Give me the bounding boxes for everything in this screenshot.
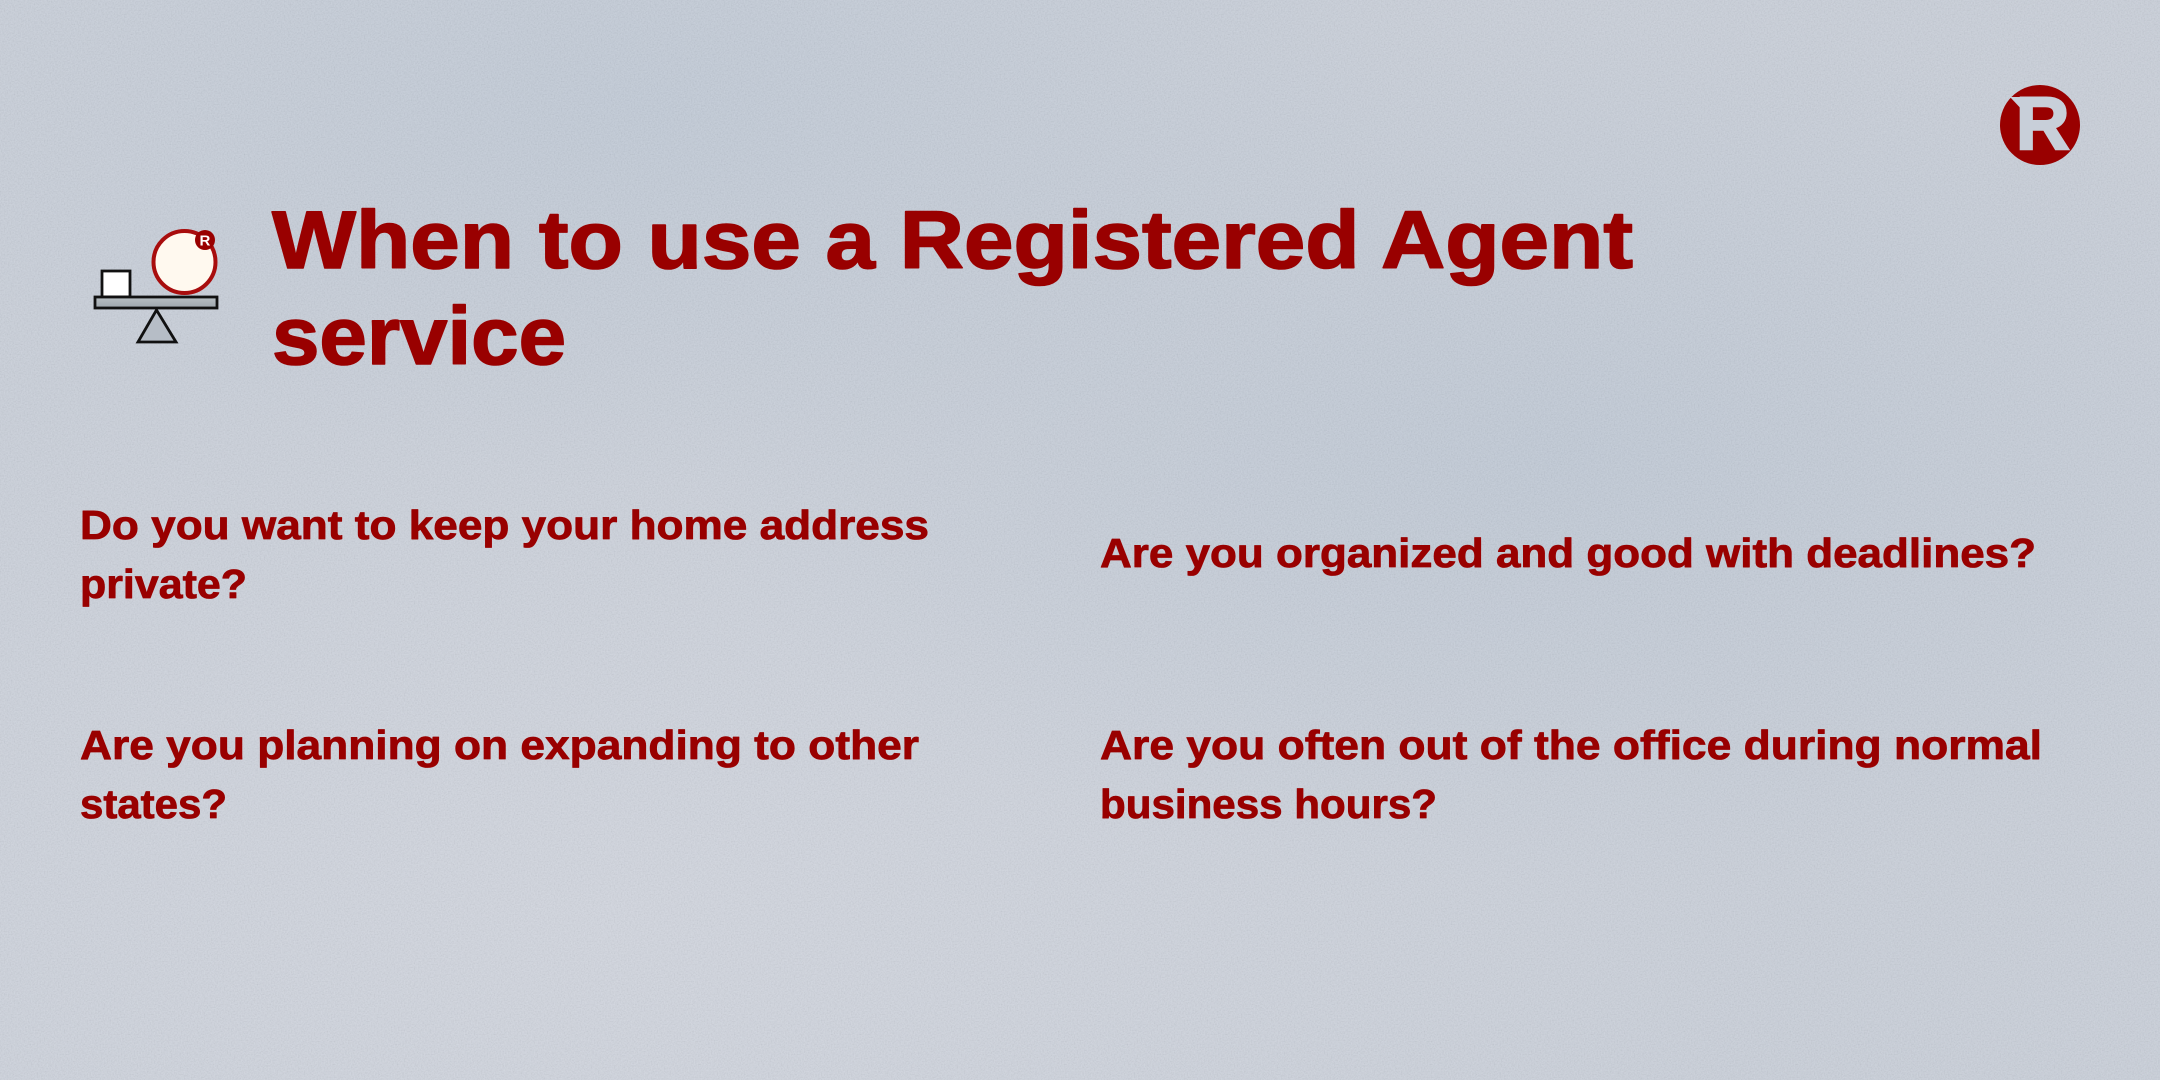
title: When to use a Registered Agent (272, 195, 1633, 286)
icon part: beam (95, 297, 217, 308)
question: organized and deadlines: Are you organized and good with deadlines? (1100, 530, 2036, 576)
icon part: white box (102, 271, 130, 297)
question: expanding to other states: states? (80, 781, 227, 827)
question: expanding to other states: Are you planning on expanding to other (80, 722, 919, 768)
icon part: R badge: R (200, 232, 210, 250)
question: out of the office: Are you often out of the office during normal (1100, 722, 2042, 768)
question: out of the office: business hours? (1100, 781, 1437, 827)
question: home address: private? (80, 561, 247, 607)
title: service (272, 291, 566, 382)
question: expanding to other states (80, 722, 919, 827)
icon part: large ball (154, 231, 216, 293)
question: home address (80, 502, 929, 607)
icon part: triangle fulcrum (138, 310, 176, 342)
title (272, 195, 1633, 382)
logo: R mark: R (2016, 82, 2069, 165)
question: out of the office (1100, 722, 2042, 827)
icon: balance scale with box and registered ball (95, 230, 217, 342)
logo: R mark (2000, 82, 2080, 165)
question: home address: Do you want to keep your home address (80, 502, 929, 548)
